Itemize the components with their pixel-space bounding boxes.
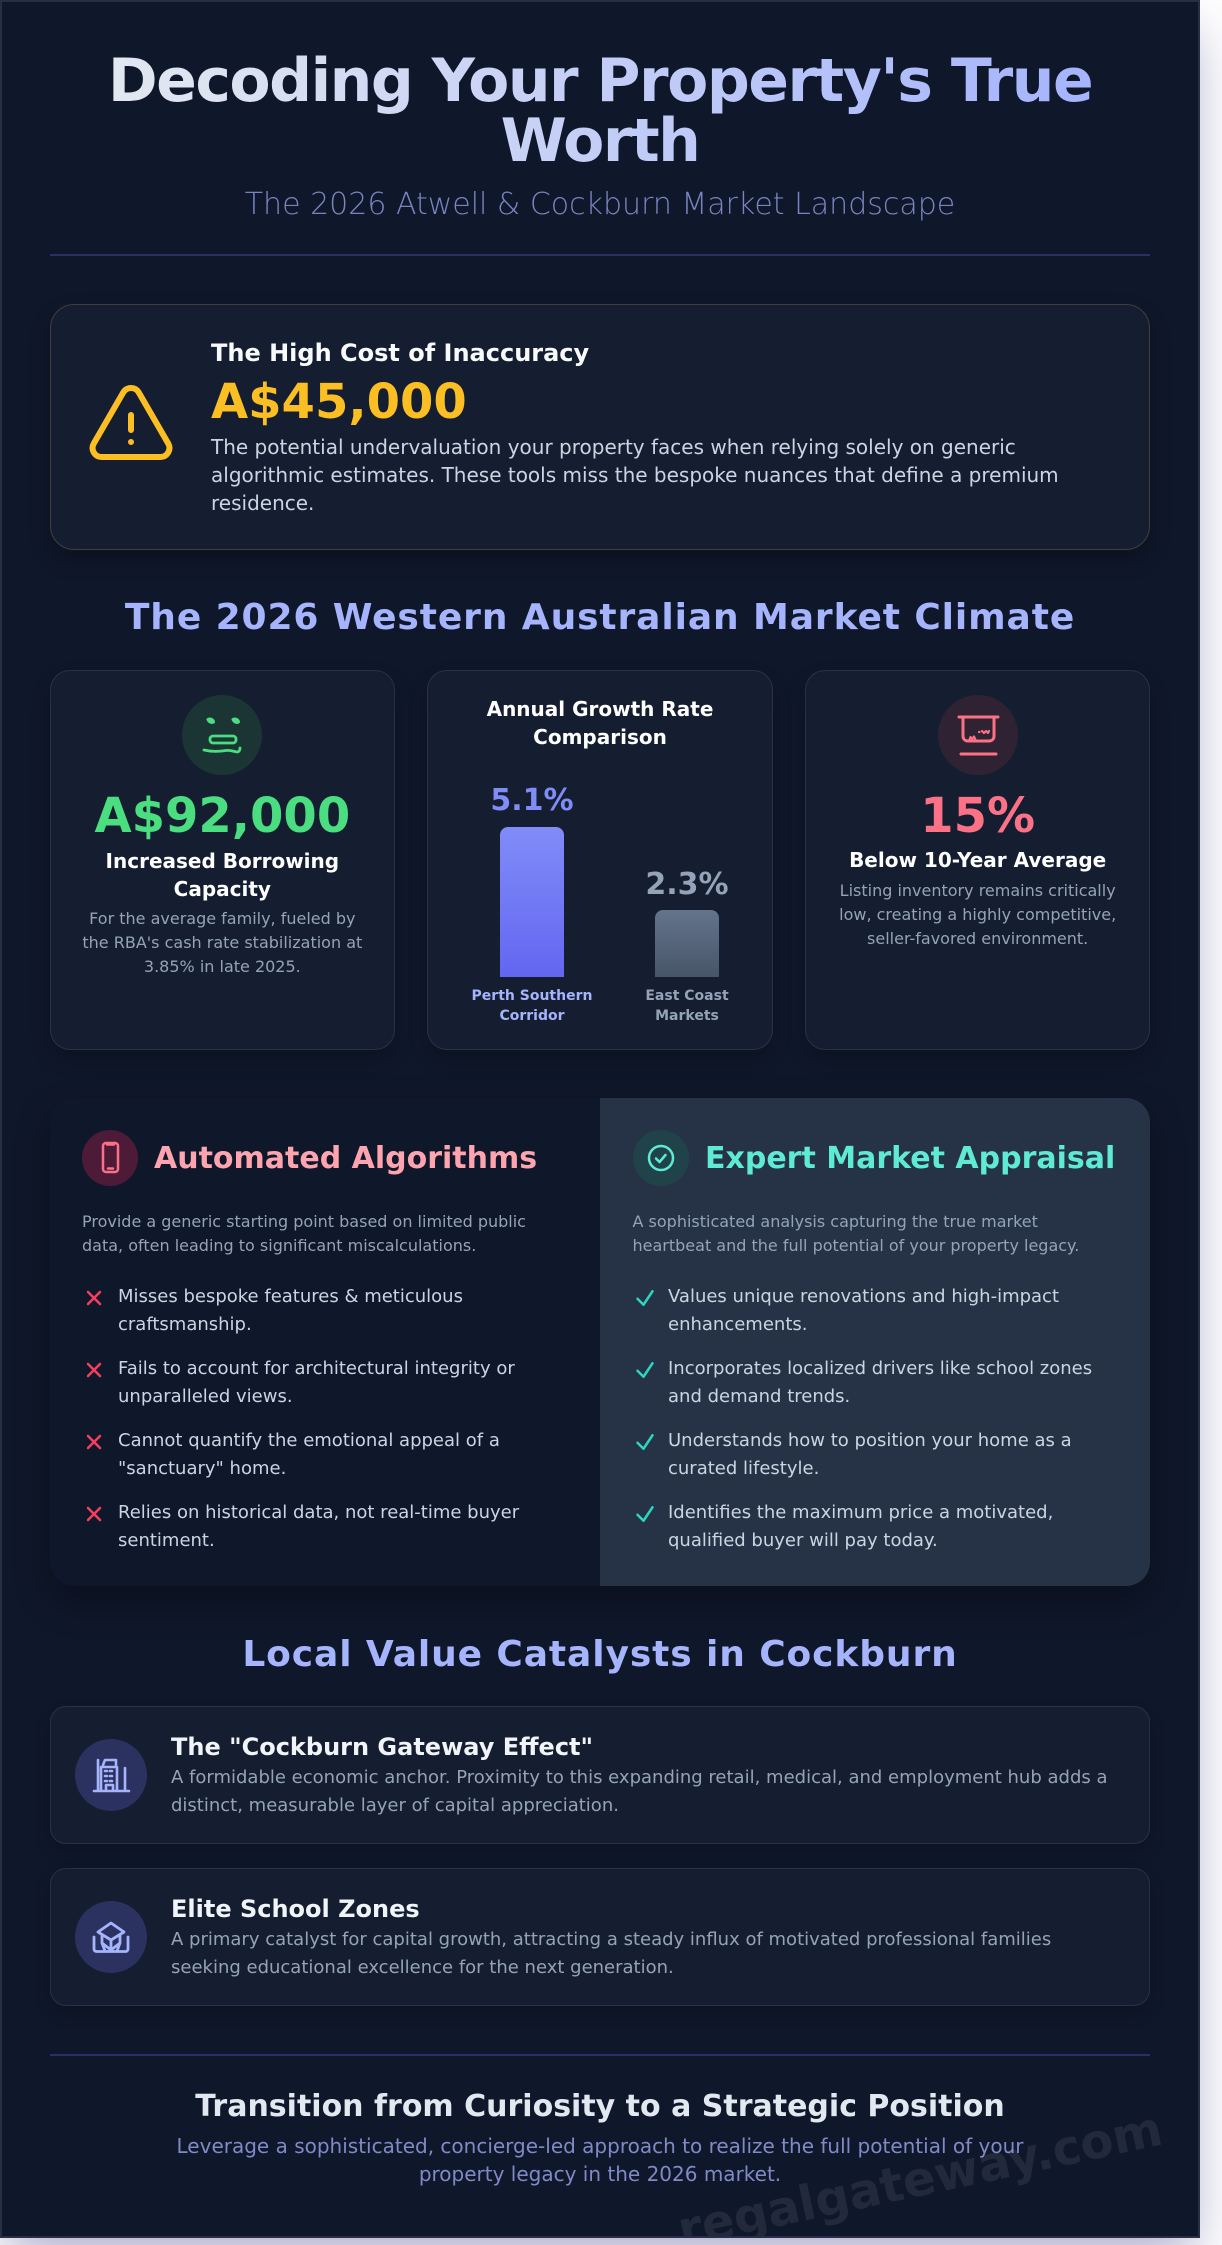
list item 4: sentiment. bbox=[118, 1530, 215, 1551]
chart title: Comparison bbox=[533, 725, 667, 749]
stat description: Listing inventory remains critically bbox=[840, 881, 1116, 900]
column description: data, often leading to significant miscalculations. bbox=[82, 1236, 476, 1255]
catalyst description: A formidable economic anchor. Proximity to this expanding retail, medical, and employment hub adds a bbox=[171, 1767, 1108, 1788]
footer text: Leverage a sophisticated, concierge-led approach to realize the full potential of your bbox=[177, 2134, 1023, 2158]
alert body text: The potential undervaluation your property faces when relying solely on generic bbox=[211, 435, 1016, 459]
icon: money in hand bbox=[182, 695, 262, 775]
list item 4: qualified buyer will pay today. bbox=[668, 1530, 938, 1551]
icon: graduation cap and book bbox=[75, 1901, 147, 1973]
list item 1: Misses bespoke features & meticulous bbox=[118, 1286, 463, 1307]
footer text: property legacy in the 2026 market. bbox=[419, 2162, 781, 2186]
chart title bbox=[486, 697, 713, 749]
title: Decoding Your Property's True bbox=[108, 46, 1092, 116]
label: East Coast Markets: Markets bbox=[655, 1008, 719, 1024]
stat value: A$92,000 bbox=[94, 788, 350, 844]
list item 2: and demand trends. bbox=[668, 1386, 850, 1407]
list item 1: enhancements. bbox=[668, 1314, 807, 1335]
bar: East Coast Markets bbox=[655, 910, 719, 977]
alert body text: algorithmic estimates. These tools miss the bespoke nuances that define a premium bbox=[211, 463, 1059, 487]
list item 2 bbox=[636, 1358, 1092, 1407]
heading: market climate: The 2026 Western Australian Market Climate bbox=[125, 597, 1075, 638]
column description: A sophisticated analysis capturing the true market bbox=[632, 1212, 1038, 1231]
list item 2: unparalleled views. bbox=[118, 1386, 293, 1407]
stat description: low, creating a highly competitive, bbox=[839, 905, 1116, 924]
subtitle: The 2026 Atwell & Cockburn Market Landscape bbox=[245, 187, 955, 222]
catalyst heading: The "Cockburn Gateway Effect" bbox=[171, 1733, 593, 1761]
stat value: 15% bbox=[920, 788, 1035, 844]
column description: heartbeat and the full potential of your property legacy. bbox=[632, 1236, 1079, 1255]
list item 3: Understands how to position your home as a bbox=[668, 1430, 1072, 1451]
catalyst description: distinct, measurable layer of capital appreciation. bbox=[171, 1795, 619, 1816]
list item 3 bbox=[86, 1430, 500, 1479]
value: Perth Southern Corridor: 5.1% bbox=[490, 783, 574, 818]
catalyst description: seeking educational excellence for the next generation. bbox=[171, 1957, 674, 1978]
heading: local value catalysts: Local Value Catalysts in Cockburn bbox=[242, 1634, 958, 1675]
stat heading: Capacity bbox=[174, 877, 271, 901]
footer heading: Transition from Curiosity to a Strategic Position bbox=[195, 2089, 1005, 2124]
list item 3 bbox=[636, 1430, 1072, 1479]
column: expert market appraisal bbox=[600, 1098, 1150, 1586]
column description bbox=[632, 1212, 1079, 1255]
stat description: seller-favored environment. bbox=[867, 929, 1088, 948]
stat description bbox=[839, 881, 1116, 948]
column: automated algorithms bbox=[82, 1130, 537, 1551]
list item 3: Cannot quantify the emotional appeal of a bbox=[118, 1430, 500, 1451]
catalyst description bbox=[171, 1767, 1108, 1816]
title bbox=[50, 51, 1150, 171]
catalyst description bbox=[171, 1929, 1051, 1978]
list item 1: Values unique renovations and high-impact bbox=[668, 1286, 1059, 1307]
panel: listing inventory bbox=[805, 670, 1150, 1050]
list item 4: Identifies the maximum price a motivated, bbox=[668, 1502, 1053, 1523]
label: Perth Southern Corridor: Perth Southern bbox=[472, 988, 592, 1004]
column description: Provide a generic starting point based on limited public bbox=[82, 1212, 526, 1231]
panel: Cockburn Gateway Effect bbox=[50, 1706, 1150, 1844]
list item 4: Relies on historical data, not real-time buyer bbox=[118, 1502, 519, 1523]
list item 3: curated lifestyle. bbox=[668, 1458, 819, 1479]
stat description: the RBA's cash rate stabilization at bbox=[82, 933, 362, 952]
column heading: Expert Market Appraisal bbox=[705, 1141, 1115, 1176]
alert figure: A$45,000 bbox=[211, 374, 467, 430]
list item 2: Incorporates localized drivers like school zones bbox=[668, 1358, 1092, 1379]
list item 4 bbox=[636, 1502, 1053, 1551]
icon: check badge bbox=[633, 1130, 689, 1186]
alert body text: residence. bbox=[211, 491, 314, 515]
catalyst heading: Elite School Zones bbox=[171, 1895, 420, 1923]
icon: office building bbox=[75, 1739, 147, 1811]
column description bbox=[82, 1212, 526, 1255]
list item 2 bbox=[86, 1358, 515, 1407]
title: Worth bbox=[501, 106, 699, 176]
alert heading: The High Cost of Inaccuracy bbox=[211, 339, 589, 367]
column heading: Automated Algorithms bbox=[154, 1141, 537, 1176]
icon: warning triangle bbox=[90, 385, 172, 460]
icon: presentation chart bbox=[938, 695, 1018, 775]
bar: Perth Southern Corridor bbox=[500, 827, 564, 977]
list item 1: craftsmanship. bbox=[118, 1314, 252, 1335]
stat description bbox=[82, 909, 362, 976]
panel: borrowing capacity bbox=[50, 670, 395, 1050]
panel: Elite School Zones bbox=[50, 1868, 1150, 2006]
label: East Coast Markets: East Coast bbox=[645, 988, 729, 1004]
list item 1 bbox=[86, 1286, 463, 1335]
label: Perth Southern Corridor: Corridor bbox=[499, 1008, 565, 1024]
stat heading: Below 10-Year Average bbox=[849, 848, 1106, 872]
icon: phone bbox=[82, 1130, 138, 1186]
stat description: 3.85% in late 2025. bbox=[144, 957, 301, 976]
alert body text bbox=[210, 435, 1059, 515]
list item 3: "sanctuary" home. bbox=[118, 1458, 286, 1479]
label: Perth Southern Corridor bbox=[472, 988, 592, 1024]
label: East Coast Markets bbox=[645, 988, 729, 1024]
footer text bbox=[177, 2134, 1024, 2186]
chart title: Annual Growth Rate bbox=[487, 697, 713, 721]
stat description: For the average family, fueled by bbox=[89, 909, 356, 928]
stat heading bbox=[106, 849, 339, 901]
catalyst description: A primary catalyst for capital growth, attracting a steady influx of motivated professional families bbox=[171, 1929, 1051, 1950]
stat heading: Increased Borrowing bbox=[106, 849, 339, 873]
list item 2: Fails to account for architectural integrity or bbox=[118, 1358, 515, 1379]
panel: high cost of inaccuracy alert bbox=[50, 304, 1150, 550]
value: East Coast Markets: 2.3% bbox=[645, 867, 729, 902]
panel: annual growth rate bar chart bbox=[427, 670, 773, 1050]
list item 4 bbox=[86, 1502, 520, 1551]
panel: comparison algorithms vs expert bbox=[50, 1098, 1150, 1586]
list item 1 bbox=[636, 1286, 1059, 1335]
